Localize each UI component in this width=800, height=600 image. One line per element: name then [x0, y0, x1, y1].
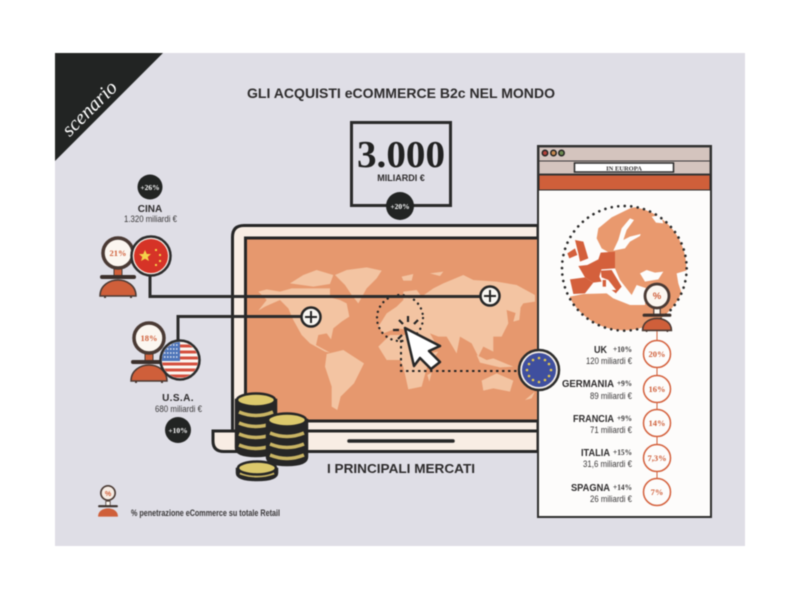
scale Europe [643, 284, 671, 332]
China value: 1.320 miliardi € [124, 214, 177, 224]
row: Germania: GERMANIA [562, 379, 614, 390]
coin stack left [236, 394, 276, 456]
land [569, 206, 687, 331]
scale Europe: % [653, 291, 662, 302]
plus marker: Asia [480, 286, 500, 306]
legend scale icon [98, 486, 118, 517]
badge +26%: +26% [140, 183, 160, 192]
percentage line [656, 330, 658, 492]
growth badge: +20% [390, 202, 410, 211]
row: UK: 120 miliardi € [586, 356, 632, 366]
coins [236, 394, 307, 480]
address box [574, 163, 674, 172]
row: Italia: 31,6 miliardi € [583, 459, 632, 469]
browser title bar [539, 147, 710, 161]
China block [100, 174, 177, 298]
USA block [131, 323, 202, 443]
address box: IN EUROPA [606, 166, 642, 172]
world map [258, 267, 535, 410]
screen [246, 238, 538, 421]
row: Spagna [571, 478, 670, 506]
row: Francia: +9% [617, 414, 632, 423]
laptop with world map [213, 226, 538, 452]
flag USA [160, 340, 200, 380]
panel: background [55, 53, 745, 546]
row: Spagna: 7% [651, 487, 663, 497]
icon: EU flag [519, 350, 559, 390]
icon: cursor [393, 316, 440, 369]
coin stack right [267, 414, 307, 465]
unit: MILIARDI € [377, 173, 425, 183]
row: Germania: 89 miliardi € [590, 391, 632, 401]
row: Germania: +9% [617, 379, 632, 388]
row: Italia: 7,3% [647, 453, 667, 463]
total box [352, 122, 450, 220]
plus marker: North America [302, 308, 320, 326]
connector: China to map [150, 276, 482, 296]
row: UK: +10% [613, 345, 632, 354]
row: Spagna: +14% [613, 483, 632, 492]
badge +10%: +10% [168, 426, 188, 435]
China name: CINA [138, 204, 162, 215]
legend [98, 486, 280, 518]
address row [539, 161, 710, 174]
trackpad bar [349, 439, 453, 443]
connector: USA to map [178, 316, 303, 342]
row: Germania: 16% [648, 384, 666, 394]
USA name: U.S.A. [162, 393, 194, 404]
connector: Europe dotted line [401, 340, 518, 371]
laptop base [213, 431, 538, 452]
row: Francia: 14% [648, 418, 666, 428]
row: UK: 20% [648, 349, 666, 359]
highlighted countries [567, 240, 622, 294]
row: UK: UK [594, 345, 608, 356]
row: Italia [581, 444, 670, 472]
laptop lid [232, 226, 538, 431]
row: Spagna: 26 miliardi € [590, 494, 632, 504]
title: GLI ACQUISTI eCOMMERCE B2c NEL MONDO [247, 85, 555, 101]
label: i principali mercati: I PRINCIPALI MERCATI [327, 461, 475, 476]
window buttons [542, 150, 564, 156]
legend scale icon: % [105, 490, 112, 498]
row: Italia: +15% [613, 448, 632, 457]
USA value: 680 miliardi € [155, 404, 202, 414]
browser frame [538, 146, 711, 517]
scale USA: 18% [140, 333, 158, 343]
row: Italia: ITALIA [581, 448, 610, 459]
row: Germania [562, 376, 670, 402]
corner tag: scenario [55, 53, 163, 161]
row: Spagna: SPAGNA [571, 483, 610, 494]
row: UK [586, 340, 670, 368]
row: Francia [573, 410, 670, 436]
scale China: 21% [110, 248, 126, 258]
panel: browser window Europe [538, 146, 711, 517]
loose coin [237, 462, 277, 480]
dotted circle [562, 206, 687, 331]
infographic [54, 52, 746, 546]
flag China [132, 236, 170, 276]
big number: 3.000 [357, 134, 445, 176]
corner tag: scenario: scenario [58, 77, 122, 141]
legend text: % penetrazione eCommerce su totale Retail [131, 508, 280, 518]
row: Francia: FRANCIA [573, 414, 614, 425]
red bar [539, 175, 710, 190]
Europe highlight dotted circle [377, 295, 423, 341]
Europe map [560, 204, 689, 333]
row: Francia: 71 miliardi € [590, 425, 632, 435]
